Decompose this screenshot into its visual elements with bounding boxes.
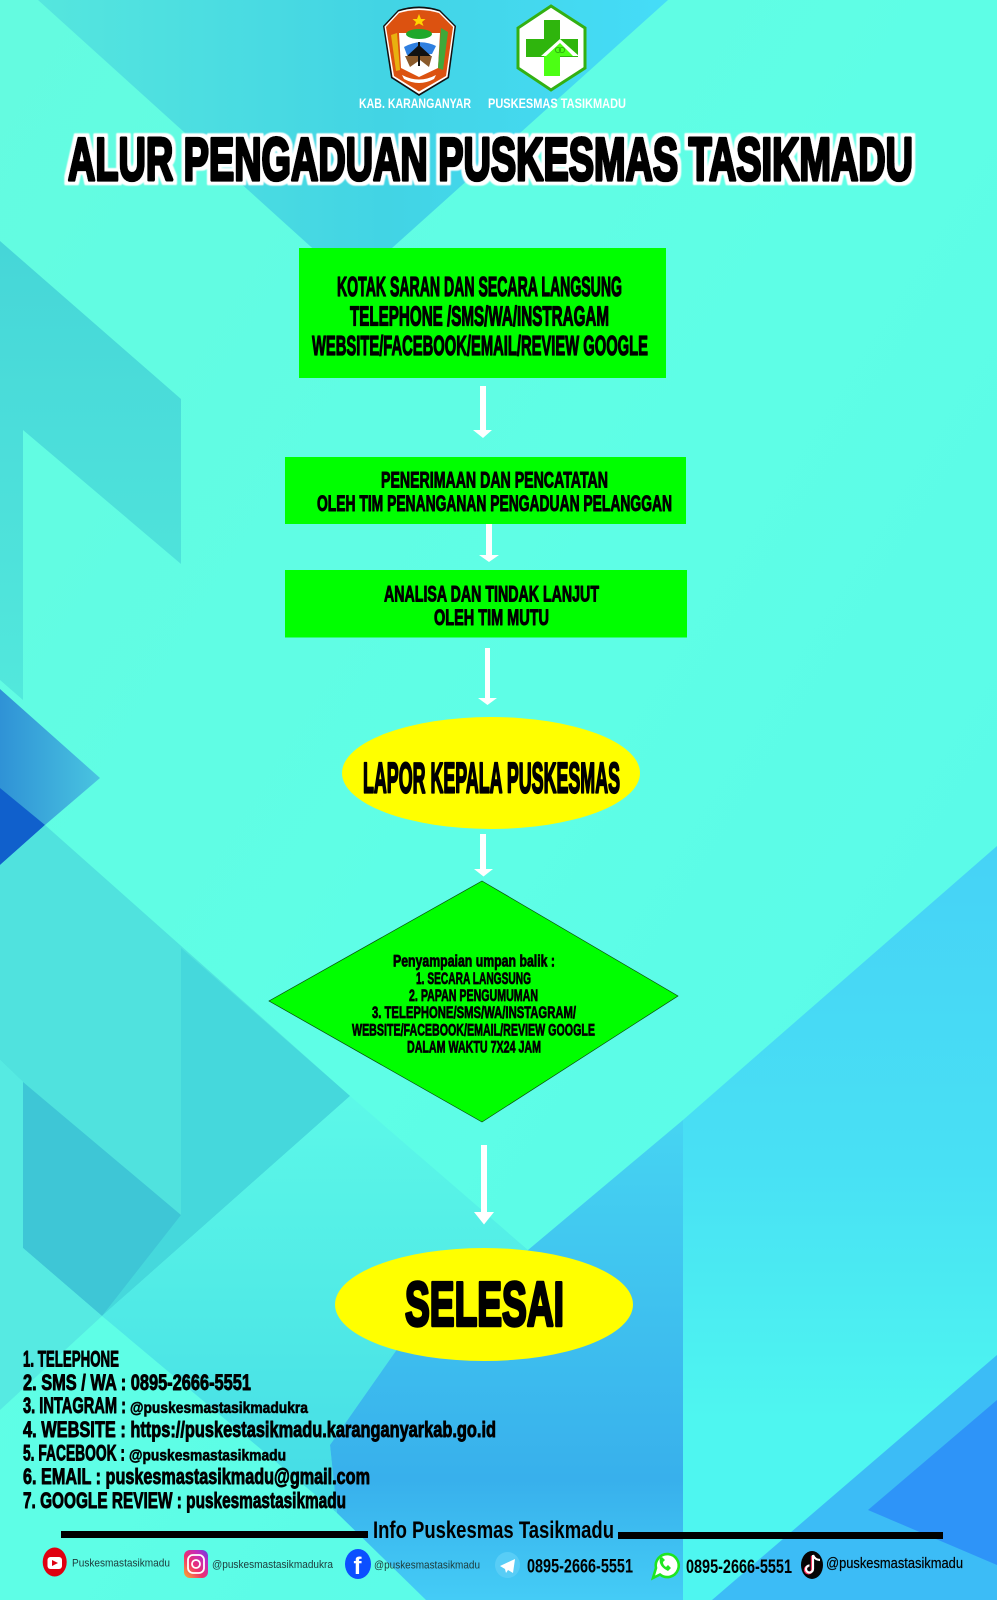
arrow: step 2 to step 3 [479, 524, 499, 562]
contact list: @puskesmastasikmadu [129, 1448, 286, 1464]
flow step 1: channels box: KOTAK SARAN DAN SECARA LANGSUNG [337, 271, 622, 302]
footer heading with rules [61, 1517, 943, 1544]
contact list [23, 1346, 496, 1513]
flow end: selesai ellipse: SELESAI [405, 1270, 564, 1340]
arrow: step 1 to step 2 [473, 386, 492, 438]
flow step 3: analysis box: ANALISA DAN TINDAK LANJUT [384, 582, 599, 606]
contact list: 4. WEBSITE : https://puskestasikmadu.karanganyarkab.go.id [23, 1417, 496, 1442]
flow step 3: analysis box [285, 570, 687, 638]
flow step 1: channels box: TELEPHONE /SMS/WA/INSTRAGAM [350, 300, 609, 332]
text: LAPOR KEPALA PUSKESMAS [363, 754, 620, 802]
contact list: 5. FACEBOOK : [23, 1440, 125, 1466]
flow step 5: feedback diamond: Penyampaian umpan balik : [393, 952, 555, 970]
flow step 5: feedback diamond: 2. PAPAN PENGUMUMAN [409, 986, 538, 1005]
social: YouTube [43, 1548, 170, 1576]
social: WhatsApp: 0895-2666-5551 [686, 1557, 792, 1578]
social: TikTok [801, 1551, 963, 1579]
social: YouTube: Puskesmastasikmadu [72, 1558, 170, 1570]
social: Telegram: 0895-2666-5551 [527, 1556, 633, 1578]
social: Telegram [495, 1552, 633, 1578]
flow end: selesai ellipse [335, 1248, 633, 1361]
flow step 1: channels box [299, 248, 666, 378]
flow step 4: report ellipse [342, 717, 640, 829]
logo: Puskesmas hexagon [518, 6, 585, 90]
flow step 5: feedback diamond: WEBSITE/FACEBOOK/EMAIL/REVIEW GOOGLE [352, 1020, 595, 1040]
contact list: 3. INTAGRAM : [23, 1393, 126, 1418]
social: Facebook [345, 1549, 480, 1580]
arrow: feedback to finish [474, 1145, 494, 1224]
footer heading with rules: Info Puskesmas Tasikmadu [373, 1517, 614, 1544]
flow step 5: feedback diamond: DALAM WAKTU 7X24 JAM [407, 1038, 541, 1056]
flow step 5: feedback diamond: 3. TELEPHONE/SMS/WA/INSTAGRAM/ [372, 1003, 576, 1022]
arrow: step 3 to report [478, 648, 497, 705]
social: WhatsApp [653, 1554, 792, 1578]
flow step 3: analysis box: OLEH TIM MUTU [434, 605, 549, 630]
social: TikTok: @puskesmastasikmadu [826, 1555, 963, 1572]
logo caption: Puskesmas Tasikmadu: PUSKESMAS TASIKMADU [488, 95, 626, 111]
flow step 2: receiving box: OLEH TIM PENANGANAN PENGADUAN PELANGGAN [317, 491, 672, 516]
social: Facebook: @puskesmastasikmadu [374, 1560, 480, 1572]
social: Facebook: f [354, 1553, 362, 1580]
contact list: @puskesmastasikmadukra [130, 1400, 308, 1417]
contact list: 2. SMS / WA : 0895-2666-5551 [23, 1370, 251, 1395]
flow step 1: channels box: WEBSITE/FACEBOOK/EMAIL/REVIEW GOOGLE [312, 330, 648, 361]
contact list: 6. EMAIL : puskesmastasikmadu@gmail.com [23, 1464, 370, 1489]
contact list: 1. TELEPHONE [23, 1346, 119, 1372]
logo: Kabupaten Karanganyar crest [383, 6, 456, 96]
flow step 5: feedback diamond [269, 881, 678, 1122]
arrow: report to feedback [474, 834, 493, 876]
social: Instagram: @puskesmastasikmadukra [212, 1559, 334, 1571]
flow step 5: feedback diamond: 1. SECARA LANGSUNG [416, 969, 531, 988]
logo caption: Kab. Karanganyar: KAB. KARANGANYAR [359, 95, 471, 111]
social: Instagram [184, 1550, 334, 1578]
flow step 2: receiving box: PENERIMAAN DAN PENCATATAN [381, 468, 608, 492]
flow step 2: receiving box [285, 457, 686, 524]
contact list: 7. GOOGLE REVIEW : puskesmastasikmadu [23, 1488, 346, 1513]
